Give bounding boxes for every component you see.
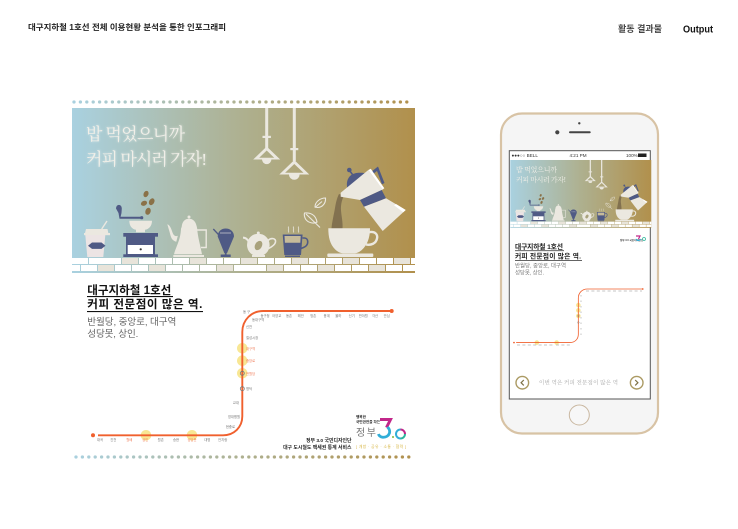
station labels: 송현: [173, 437, 179, 442]
icon: teapot: [243, 232, 276, 257]
station labels: 각산: [372, 313, 378, 318]
station labels: 성당못: [187, 437, 197, 442]
button: previous: [516, 376, 529, 389]
home button: [569, 405, 589, 425]
status bar: 4:21 PM: [569, 153, 587, 158]
phone speaker and camera: [555, 122, 591, 134]
status bar: 100%: [626, 153, 638, 158]
button: next: [630, 376, 643, 389]
station labels: 동촌: [286, 313, 292, 318]
status bar: [512, 153, 646, 158]
icon: moka pot: [341, 166, 406, 231]
banner headline: 커피 마시러 가자!: [86, 150, 207, 169]
icon: coffee grinder: [116, 190, 158, 257]
logo: government 3.0: [356, 414, 406, 449]
icon: big cup: [327, 228, 377, 257]
logo: government 3.0: 정부: [356, 427, 376, 439]
mini heading: [515, 242, 582, 261]
service caption: 정부 3.0 국민디자인단: [306, 437, 352, 444]
station labels: 명덕: [246, 386, 252, 391]
brick wall: [72, 258, 415, 271]
station labels: 반월당: [246, 371, 255, 376]
banner illustration: [72, 108, 415, 273]
mini logo: [620, 236, 646, 242]
logo: government 3.0: 국민안전을 하는: [356, 419, 381, 424]
phone screen: [509, 151, 650, 399]
phone mockup: [501, 114, 658, 434]
subway line map: [91, 309, 394, 442]
mini banner headline: 커피 마시러 가자!: [516, 175, 566, 184]
station labels: 진천: [110, 437, 116, 442]
station labels: 동 구: [243, 310, 250, 314]
mini station list: 성당못, 상인.: [515, 268, 544, 276]
station labels: 반야월: [359, 313, 368, 318]
mini heading: 대구지하철 1호선: [515, 242, 563, 251]
logo: government 3.0: [ 개방 · 공유 · 소통 · 협력 ]: [356, 444, 406, 449]
section label: output: Output: [683, 24, 714, 36]
logo: government 3.0: 행복한: [356, 414, 367, 419]
station list text: 반월당, 중앙로, 대구역: [87, 316, 176, 328]
coffee stream: [332, 194, 344, 228]
panel: coffee banner: [72, 108, 415, 273]
icon: parfait glass: [213, 228, 234, 257]
station labels: 중앙로: [246, 358, 255, 363]
station labels: 칠성시장: [246, 335, 258, 340]
status bar: ●●●○○ BELL: [512, 153, 538, 158]
station labels: 방촌: [310, 313, 316, 318]
station labels: 월촌: [158, 437, 164, 442]
station labels: 동구청: [260, 313, 270, 318]
station list text: 성당못, 상인.: [87, 329, 138, 340]
station labels: 영대병원: [228, 414, 240, 419]
icon: drip kettle: [167, 216, 206, 257]
station labels: 동대구역: [252, 317, 264, 322]
station labels: [97, 310, 390, 442]
service caption: 대구 도시철도 맥세권 통계 서비스: [283, 444, 352, 451]
icon: pendant lamp left: [253, 108, 280, 164]
station labels: 현충로: [226, 424, 235, 429]
banner headline: 밥 먹었으니까: [86, 124, 186, 144]
service caption: [283, 437, 352, 451]
banner headline: 밥 먹었으니까: [86, 124, 186, 144]
station labels: 아양교: [272, 313, 281, 318]
station labels: 안심: [384, 313, 390, 318]
heading: stations with many coffee shops: [87, 283, 203, 312]
mini subway line: [513, 288, 644, 345]
line graphic: [91, 309, 394, 441]
section label: activity result: 활동 결과물: [618, 23, 662, 34]
station labels: 해안: [298, 313, 304, 318]
station labels: 신기: [349, 313, 355, 318]
station labels: 대곡: [97, 437, 103, 442]
icon: pendant lamp right: [279, 108, 309, 180]
banner headline: 커피 마시러 가자!: [86, 150, 207, 169]
station labels: 대구역: [246, 346, 255, 351]
top dotted divider: [74, 100, 412, 104]
station labels: 안지랑: [218, 437, 227, 442]
mini station ticks: [517, 291, 642, 345]
station labels: 신천: [246, 324, 252, 329]
bottom dotted divider: [76, 455, 412, 459]
heading: stations with many coffee shops: 커피 전문점이 많은 역.: [87, 297, 202, 311]
banner headline: [86, 124, 207, 169]
mini logo: 정부 3.0 국민디자인단: [620, 238, 644, 242]
station labels: 교대: [233, 400, 239, 405]
station labels: 대명: [204, 437, 210, 442]
station list text: [87, 316, 176, 340]
mini caption: 이번 역은 커피 전문점이 많은 역: [539, 378, 618, 386]
mini heading: 커피 전문점이 많은 역.: [515, 252, 581, 260]
mini station list: 반월당, 중앙로, 대구역: [515, 262, 566, 270]
icon: takeaway cup: [84, 221, 110, 257]
page title: 대구지하철 1호선 전체 이용현황 분석을 통한 인포그래피: [28, 22, 226, 32]
mini banner: [510, 160, 651, 228]
mini banner headline: [516, 165, 566, 184]
station labels: 상인: [142, 437, 148, 442]
mini station list: [515, 262, 566, 276]
station labels: 율하: [335, 313, 341, 318]
icon: leaves: [304, 198, 326, 228]
station labels: 용계: [324, 313, 330, 318]
mini banner headline: 밥 먹었으니까: [516, 165, 557, 174]
station labels: 월배: [126, 437, 132, 442]
icon: hot mug: [283, 226, 308, 257]
heading: stations with many coffee shops: 대구지하철 1호선: [87, 283, 171, 297]
phone body: [501, 114, 658, 434]
